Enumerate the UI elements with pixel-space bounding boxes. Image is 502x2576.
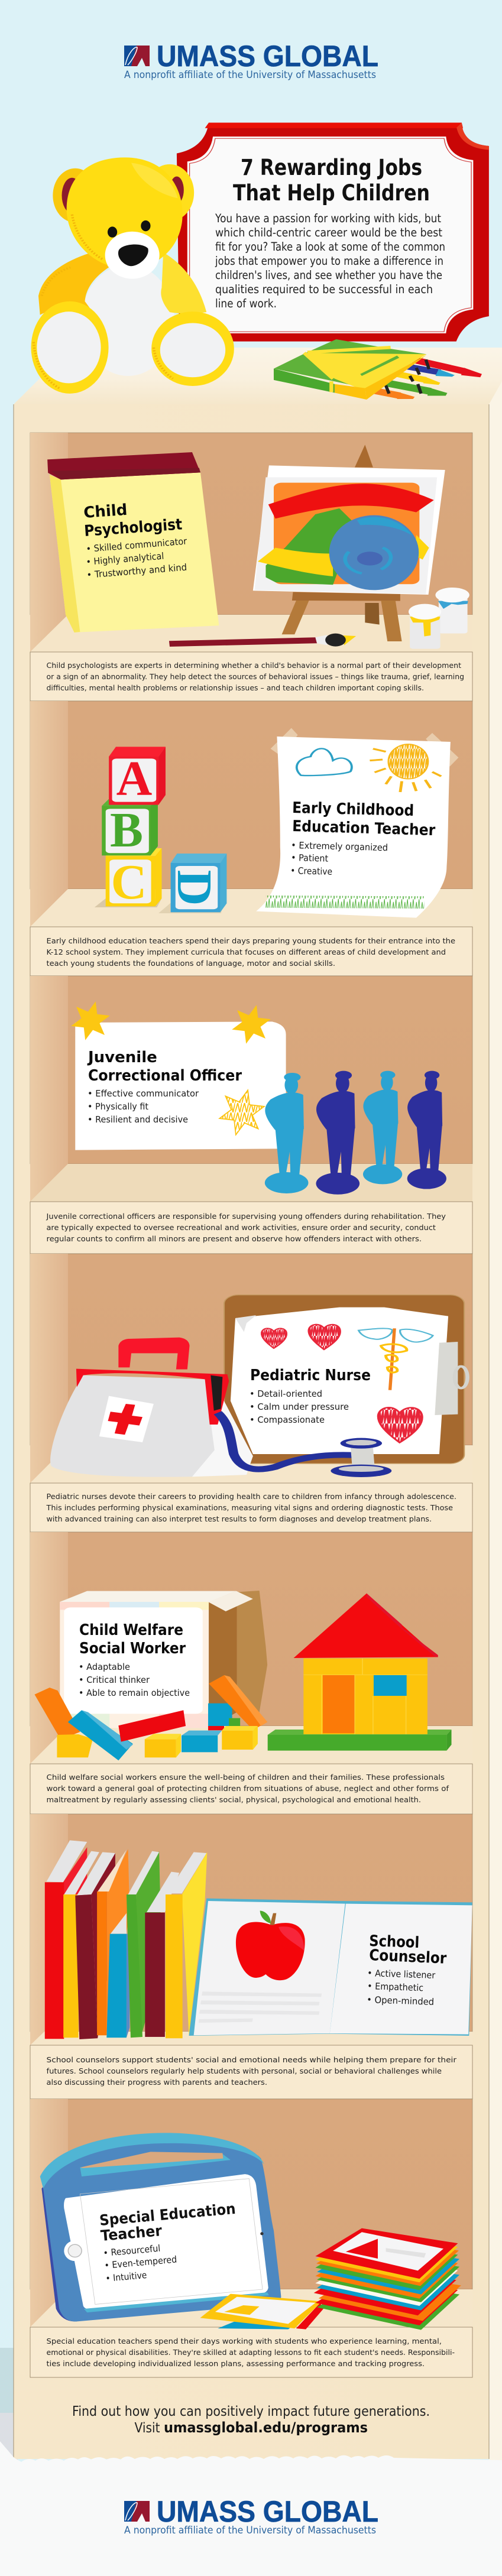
icon: clipboard <box>224 1295 468 1464</box>
icon: UMass mark <box>124 2501 150 2522</box>
tagline: A nonprofit affiliate of the University of Massachusetts <box>124 69 376 81</box>
qualities list: • Patient <box>291 852 328 864</box>
intro text: jobs that empower you to make a difference in <box>215 254 443 268</box>
qualities list: • Detail-oriented <box>250 1388 322 1399</box>
description: Child psychologists are experts in determining whether a child's behavior is a normal part of their development <box>46 661 461 670</box>
heading <box>292 799 436 839</box>
intro text: children's lives, and see whether you have the <box>215 268 442 282</box>
panel: juvenile correctional officer <box>30 976 472 1254</box>
icon: caduceus <box>358 1328 433 1390</box>
heading: Psychologist <box>83 515 183 540</box>
panel: special education teacher <box>30 2099 472 2377</box>
panel: child psychologist <box>30 433 472 701</box>
description: with advanced training can also interpret test results to form diagnoses and develop treatment plans. <box>46 1514 432 1523</box>
description: Special education teachers spend their days working with students who experience learning, mental, <box>46 2337 442 2345</box>
call to action: Find out how you can positively impact future generations. <box>72 2404 430 2419</box>
qualities list: • Extremely organized <box>291 840 388 853</box>
description <box>46 1492 456 1523</box>
shelf top surface <box>14 348 502 404</box>
icon: crayon box <box>274 339 482 400</box>
description: or a sign of an abnormality. They help detect the sources of behavioral issues – things like trauma, grief, learning <box>46 672 464 681</box>
description: emotional or physical disabilities. They're skilled at adapting lessons to fit each student's needs. Responsibili- <box>46 2348 455 2357</box>
icon: block house <box>268 1594 452 1751</box>
description: School counselors support students' social and emotional needs while helping them prepare for their <box>46 2055 457 2064</box>
heading <box>369 1932 447 1968</box>
qualities list: • Creative <box>290 865 332 877</box>
description: Child welfare social workers ensure the well-being of children and their families. These professionals <box>46 1773 445 1782</box>
heading: Child <box>83 501 128 522</box>
qualities list: • Calm under pressure <box>250 1401 349 1412</box>
qualities list: • Adaptable <box>79 1662 130 1672</box>
qualities list: • Physically fit <box>88 1101 148 1112</box>
qualities list: • Critical thinker <box>79 1675 150 1685</box>
qualities list: • Compassionate <box>250 1414 325 1425</box>
icon: flash cards <box>200 2228 461 2330</box>
description: teach young students the foundations of language, motor and social skills. <box>46 959 335 968</box>
title <box>233 155 430 206</box>
torn paper footer <box>0 2441 502 2576</box>
call to action: Visit <box>135 2421 160 2436</box>
description: work toward a general goal of protecting children from situations of abuse, neglect and other forms of <box>46 1784 449 1793</box>
panel: school counselor <box>30 1814 472 2099</box>
icon: first aid bag with stethoscope <box>50 1338 391 1477</box>
wordmark: UMASS GLOBAL <box>157 40 378 73</box>
qualities list: • Resourceful <box>103 2243 161 2259</box>
description: also discussing their progress with parents and teachers. <box>46 2078 267 2087</box>
heading: Correctional Officer <box>88 1067 242 1085</box>
heading: Early Childhood <box>292 799 414 820</box>
icon: row of books <box>45 1840 207 2039</box>
qualities list <box>250 1388 349 1425</box>
description: K-12 school system. They implement curricula that focuses on different areas of child development and <box>46 948 446 956</box>
heading: Juvenile <box>87 1049 157 1066</box>
qualities list <box>367 1968 436 2007</box>
intro text: You have a passion for working with kids, but <box>215 212 441 225</box>
call to action: umassglobal.edu/programs <box>164 2419 368 2436</box>
title: That Help Children <box>233 180 430 206</box>
description <box>46 2055 457 2087</box>
description: are typically expected to oversee recreational and work activities, ensure order and security, conduct <box>46 1223 436 1232</box>
description: futures. School counselors regularly help students with personal, social or behavioral challenges while <box>46 2066 442 2075</box>
intro text <box>215 212 445 310</box>
icon: toy officers <box>265 1071 446 1195</box>
description <box>46 1773 449 1804</box>
qualities list: • Effective communicator <box>88 1088 199 1099</box>
icon: alphabet blocks <box>95 747 226 913</box>
description: Early childhood education teachers spend their days preparing young students for their entrance into the <box>46 936 455 945</box>
heading: Education Teacher <box>292 817 436 839</box>
icon: alphabet blocks: A <box>116 751 153 806</box>
qualities list: • Empathetic <box>367 1981 423 1993</box>
intro text: line of work. <box>215 297 277 310</box>
heading <box>79 1621 186 1657</box>
qualities list: • Skilled communicator <box>86 536 187 554</box>
icon: teddy bear <box>31 157 234 394</box>
tagline: A nonprofit affiliate of the University of Massachusetts <box>124 2525 376 2536</box>
heading: Pediatric Nurse <box>250 1367 371 1384</box>
icon: alphabet blocks: D <box>167 870 222 906</box>
logo: top <box>124 40 378 81</box>
icon: red apple <box>236 1910 305 1980</box>
heading: School <box>369 1932 420 1952</box>
shelf bay <box>30 976 472 1254</box>
shelf frame <box>14 404 489 2459</box>
description <box>46 2337 455 2368</box>
qualities list: • Intuitive <box>105 2270 147 2284</box>
qualities list <box>86 536 187 580</box>
heading: Child Welfare <box>79 1621 183 1639</box>
call to action <box>72 2404 430 2436</box>
logo: bottom <box>124 2495 378 2536</box>
heading <box>99 2200 237 2244</box>
heading <box>83 501 183 540</box>
icon: paint brush and jars <box>169 588 469 649</box>
qualities list <box>290 840 388 877</box>
qualities list: • Resilient and decisive <box>88 1114 188 1125</box>
qualities list: • Highly analytical <box>86 551 164 567</box>
qualities list <box>79 1662 190 1698</box>
panel: early childhood education teacher <box>30 701 472 976</box>
qualities list: • Open-minded <box>367 1994 434 2007</box>
icon: cardboard toy box <box>60 1591 267 1728</box>
qualities list <box>103 2243 177 2284</box>
qualities list: • Active listener <box>367 1968 436 1981</box>
intro text: which child-centric career would be the best <box>215 226 442 239</box>
intro text: qualities required to be successful in each <box>215 283 433 296</box>
shelf bay <box>30 701 472 976</box>
heading: Special Education <box>99 2200 237 2229</box>
icon: alphabet blocks: C <box>111 855 147 910</box>
icon: alphabet blocks: B <box>110 803 143 858</box>
description: Juvenile correctional officers are responsible for supervising young offenders during rehabilitation. They <box>46 1212 446 1221</box>
icon: easel with painting <box>253 445 445 641</box>
icon: tablet <box>40 2133 281 2322</box>
qualities list: • Even-tempered <box>104 2254 177 2271</box>
description <box>46 936 455 968</box>
icon: UMass mark <box>124 46 150 66</box>
shelf bay <box>30 433 472 701</box>
qualities list: • Able to remain objective <box>79 1688 190 1698</box>
description: ties include developing individualized lesson plans, assessing performance and tracking progress. <box>46 2359 425 2368</box>
icon: notepad <box>47 452 219 632</box>
icon: child drawing on paper <box>256 728 458 918</box>
shelf bay <box>30 1532 472 1814</box>
description: maltreatment by regularly assessing clients' social, physical, psychological and emotional health. <box>46 1795 421 1804</box>
heading: Social Worker <box>79 1640 186 1657</box>
description: This includes performing physical examinations, measuring vital signs and ordering diagnostic tests. Those <box>46 1503 453 1512</box>
description <box>46 661 464 692</box>
intro text: fit for you? Take a look at some of the common <box>215 240 445 254</box>
panel: pediatric nurse <box>30 1254 472 1532</box>
description <box>46 1212 446 1243</box>
icon: open book <box>189 1899 472 2036</box>
red frame <box>177 123 489 342</box>
heading: Counselor <box>369 1946 447 1968</box>
icon: loose toy blocks <box>34 1675 267 1760</box>
shelf bay <box>30 1814 472 2099</box>
description: difficulties, mental health problems or relationship issues – and teach children important coping skills. <box>46 683 424 692</box>
wordmark: UMASS GLOBAL <box>157 2495 378 2528</box>
panel: child welfare social worker <box>30 1532 472 1814</box>
heading: Teacher <box>100 2222 163 2244</box>
shelf bay <box>30 2099 472 2377</box>
title: 7 Rewarding Jobs <box>241 155 422 180</box>
description: regular counts to confirm all minors are present and observe how offenders interact with others. <box>46 1234 422 1243</box>
icon: gold stars <box>71 1001 271 1135</box>
description: Pediatric nurses devote their careers to providing health care to children from infancy through adolescence. <box>46 1492 456 1501</box>
notice paper <box>75 1021 286 1150</box>
shelf bay <box>30 1254 472 1532</box>
heading <box>87 1049 242 1085</box>
title sign <box>177 123 489 342</box>
qualities list <box>88 1088 199 1125</box>
qualities list: • Trustworthy and kind <box>86 562 187 580</box>
